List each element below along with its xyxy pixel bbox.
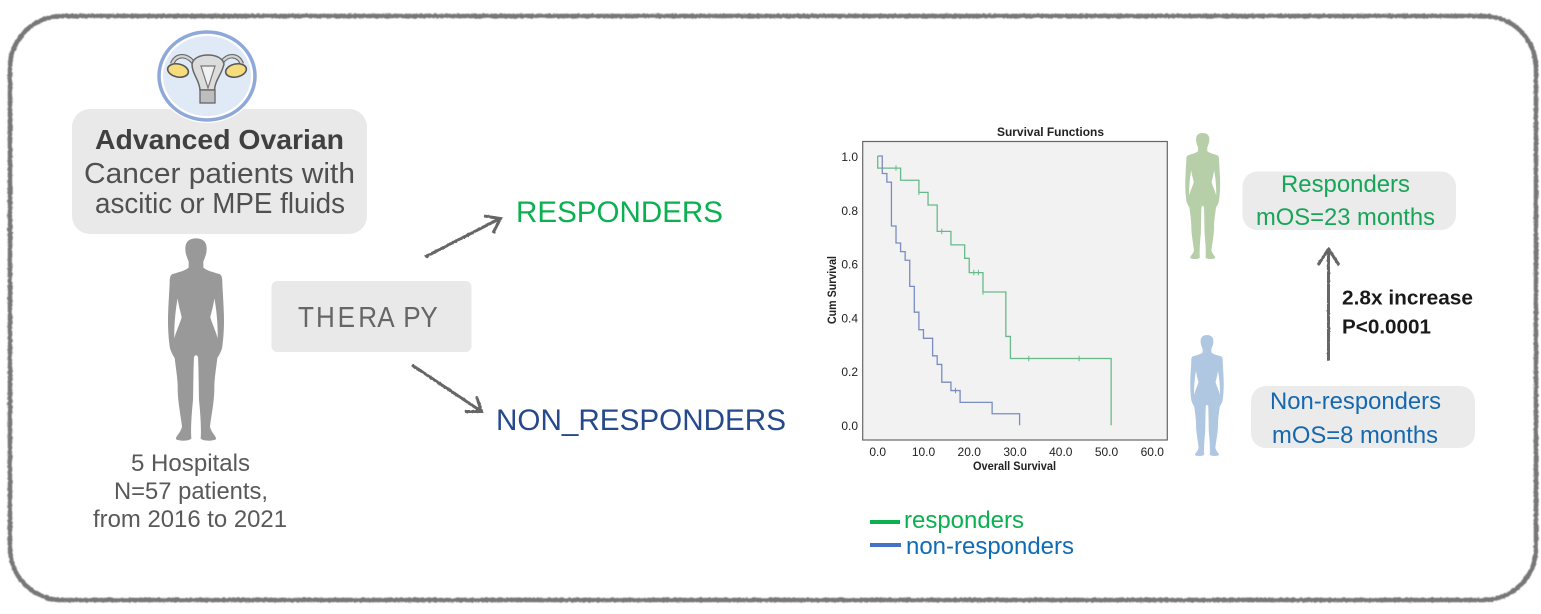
legend: non-responders: non-responders xyxy=(906,533,1074,560)
y axis labels: 1.0 xyxy=(841,150,858,164)
legend: responders: responders xyxy=(904,507,1024,534)
patient description box xyxy=(72,109,367,234)
text: from 2016 to 2021: from 2016 to 2021 xyxy=(93,506,287,533)
label: RESPONDERS: RESPONDERS xyxy=(516,196,723,229)
x axis labels: 0.0 xyxy=(869,445,886,459)
panel: responders result xyxy=(1242,171,1456,231)
icon: green human silhouette xyxy=(1185,133,1220,259)
non-responders survival curve xyxy=(878,156,1020,425)
icon: gray human silhouette xyxy=(168,238,224,441)
text: P value: P<0.0001 xyxy=(1342,316,1431,338)
panel: patient cohort xyxy=(72,29,367,533)
text: 5 Hospitals: 5 Hospitals xyxy=(131,450,250,477)
chart plot area xyxy=(863,142,1167,440)
text: Non-responders: Non-responders xyxy=(1270,388,1441,415)
icon: blue human silhouette xyxy=(1190,335,1224,456)
panel: non-responders result xyxy=(1251,386,1475,449)
x axis labels: 60.0 xyxy=(1141,445,1164,459)
x axis labels: 40.0 xyxy=(1049,445,1073,459)
y axis labels xyxy=(841,150,858,433)
text: mOS=8 months: mOS=8 months xyxy=(1272,422,1438,449)
arrow: therapy to responders xyxy=(425,216,500,257)
y axis labels: 0.6 xyxy=(841,258,858,272)
text: cohort details xyxy=(93,450,287,533)
text: THERAPY: THERAPY xyxy=(298,301,438,333)
y axis labels: 0.0 xyxy=(841,419,858,433)
text: ascitic or MPE fluids: ascitic or MPE fluids xyxy=(95,188,345,220)
x axis title: Overall Survival xyxy=(973,459,1056,473)
icon: ovary and uterus in a circle xyxy=(156,29,258,123)
y axis title: Cum Survival xyxy=(825,256,839,324)
y axis labels: 0.2 xyxy=(841,365,858,379)
text: mOS=23 months: mOS=23 months xyxy=(1256,204,1435,231)
x axis labels: 30.0 xyxy=(1003,445,1027,459)
chart: Kaplan-Meier survival functions xyxy=(825,125,1167,473)
x axis labels: 20.0 xyxy=(958,445,981,459)
text: N=57 patients: N=57 patients, xyxy=(114,478,268,505)
legend xyxy=(870,507,1074,560)
text: cancer patients with: Cancer patients with xyxy=(84,158,355,190)
arrow: increase from non-responders to responders xyxy=(1318,249,1339,361)
responders survival curve xyxy=(878,156,1111,425)
x axis labels: 50.0 xyxy=(1095,445,1119,459)
y axis labels: 0.8 xyxy=(841,204,858,218)
panel: therapy box xyxy=(272,281,472,352)
text: 2.8x increase: 2.8x increase xyxy=(1342,288,1473,310)
chart title: Survival Functions xyxy=(997,125,1104,139)
callout: statistics xyxy=(1342,288,1473,338)
x axis labels xyxy=(869,445,1164,459)
label: NON_RESPONDERS: NON_RESPONDERS xyxy=(496,404,786,437)
text: Responders: Responders xyxy=(1281,171,1410,198)
x axis labels: 10.0 xyxy=(912,445,936,459)
y axis labels: 0.4 xyxy=(841,312,858,326)
heading: Advanced Ovarian: Advanced Ovarian xyxy=(95,124,344,155)
arrow: therapy to non-responders xyxy=(412,365,482,412)
